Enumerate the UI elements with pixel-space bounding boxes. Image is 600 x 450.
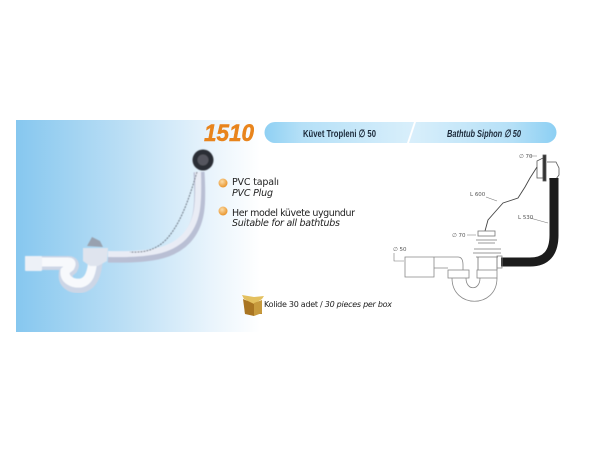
panel: blue gradient product background	[16, 120, 260, 332]
dimension: L 600: L 600	[470, 192, 486, 198]
title: model number: 1510	[204, 120, 255, 147]
technical drawing	[393, 154, 559, 301]
dimension: diameter 70 drain: ∅ 70	[452, 233, 466, 239]
plug disc	[192, 150, 214, 170]
dimension: L 530: L 530	[518, 215, 534, 221]
strainer and drain	[473, 231, 501, 270]
product photo: bathtub siphon	[25, 150, 214, 286]
feature: suits all bathtubs: Her model küvete uygundur	[232, 208, 355, 219]
header label: Turkish: Küvet Tropleni ∅ 50	[303, 128, 376, 140]
drain body	[83, 248, 108, 266]
feature: PVC plug: PVC Plug	[232, 188, 273, 199]
dimension: diameter 70 top: ∅ 70	[519, 154, 533, 160]
packaging note: Kolide 30 adet / 30 pieces per box	[264, 300, 392, 309]
overflow tube	[108, 172, 200, 257]
trap outline	[405, 256, 502, 301]
overflow fitting	[537, 155, 559, 181]
header bar	[264, 122, 556, 143]
trap	[25, 258, 96, 286]
outlet	[25, 256, 42, 271]
black hose	[501, 178, 554, 262]
feature: suits all bathtubs: Suitable for all bathtubs	[232, 218, 340, 229]
feature: PVC plug	[218, 177, 279, 199]
header label: English: Bathtub Siphon ∅ 50	[447, 128, 521, 140]
feature: PVC plug: PVC tapalı	[232, 177, 279, 188]
icon: cardboard box	[242, 295, 264, 316]
feature: suits all bathtubs	[218, 206, 355, 229]
dimension: diameter 50: ∅ 50	[393, 247, 407, 253]
cable	[485, 167, 537, 231]
leader lines	[394, 156, 548, 261]
chain	[130, 172, 197, 252]
